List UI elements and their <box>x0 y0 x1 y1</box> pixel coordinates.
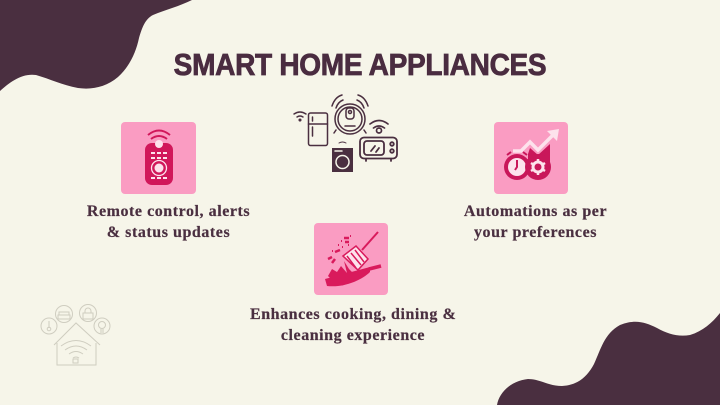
panel: remote control <box>121 122 196 194</box>
icon: robot vacuum <box>332 95 368 134</box>
text: cooking <box>250 306 456 344</box>
text: remote control: Remote control, alerts <box>87 203 250 220</box>
text: automations: your preferences <box>474 224 597 241</box>
panel: automations <box>494 122 568 194</box>
icon: stopwatch, gear and arrow <box>504 129 559 180</box>
text: automations: Automations as per <box>464 203 607 220</box>
text: remote control <box>87 203 250 241</box>
title: SMART HOME APPLIANCES <box>174 47 546 82</box>
text: automations <box>464 203 607 241</box>
text: cooking: Enhances cooking, dining & <box>250 306 456 323</box>
text: remote control: & status updates <box>107 224 230 241</box>
panel: cooking <box>314 223 388 295</box>
icon: washing machine <box>332 142 353 172</box>
icon: remote <box>145 130 173 185</box>
text: cooking: cleaning experience <box>281 327 425 344</box>
icon: microwave <box>360 138 397 161</box>
icon: wifi signal <box>370 120 388 133</box>
icon: pan and spatula <box>325 231 382 286</box>
icon: fridge <box>294 112 328 146</box>
